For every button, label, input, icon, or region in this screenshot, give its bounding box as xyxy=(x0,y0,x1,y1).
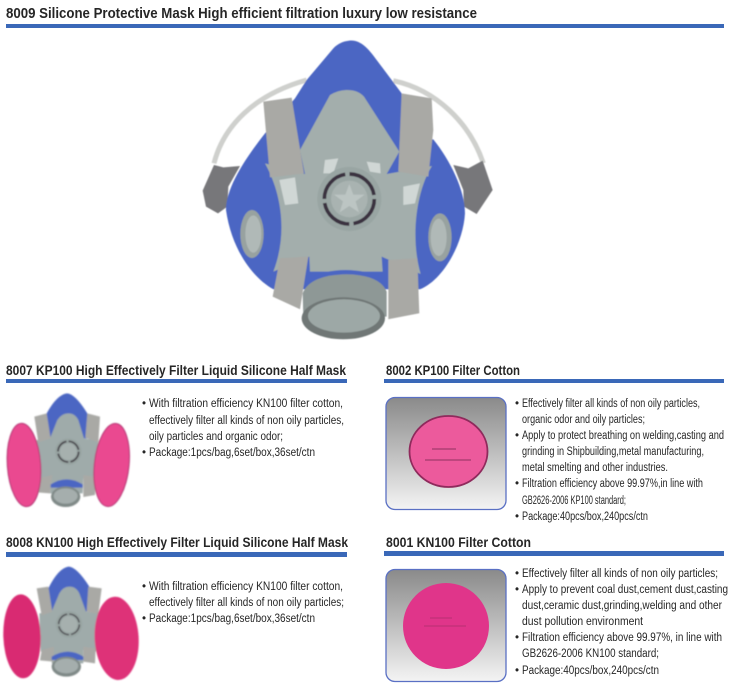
section heading: 8002 xyxy=(384,362,724,383)
text block: 8008 description: • xyxy=(142,581,146,593)
section heading: 8008: 8008 KN100 High Effectively Filter Liquid Silicone Half Mask xyxy=(6,534,348,550)
title xyxy=(6,5,724,28)
text block: 8001 description: GB2626-2006 KN100 standard; xyxy=(522,648,659,660)
centre valve xyxy=(317,167,381,231)
main product photo: 8009 mask xyxy=(203,41,493,339)
text block: 8001 description: Package:40pcs/box,240pcs/ctn xyxy=(522,665,659,677)
section heading: 8007: 8007 KP100 High Effectively Filter Liquid Silicone Half Mask xyxy=(6,362,346,378)
section heading: 8001 xyxy=(384,534,724,556)
headband xyxy=(214,80,483,163)
product photo: 8001 filter cotton xyxy=(386,570,506,682)
text block: 8001 description: dust pollution environment xyxy=(522,616,644,628)
left filter port xyxy=(240,210,264,258)
right filter port xyxy=(428,213,452,261)
right buckle xyxy=(453,161,493,214)
text block: 8002 description xyxy=(515,398,724,523)
text block: 8002 description: • xyxy=(515,398,519,410)
product photo: 8007 mask with filters xyxy=(4,393,133,508)
text block: 8007 description: oily particles and organic odor; xyxy=(149,431,283,443)
text block: 8002 description: • xyxy=(515,430,519,442)
text block: 8002 description: • xyxy=(515,511,519,523)
blue silicone body xyxy=(226,41,465,289)
left buckle xyxy=(203,165,240,213)
text block: 8007 description: effectively filter all kinds of non oily particles, xyxy=(149,415,344,427)
text block: 8001 description xyxy=(515,568,728,677)
text block: 8008 description xyxy=(142,581,344,625)
text block: 8008 description: Package:1pcs/bag,6set/box,36set/ctn xyxy=(149,613,315,625)
exhale cover xyxy=(303,274,387,317)
text block: 8007 description: With filtration efficiency KN100 filter cotton, xyxy=(149,398,343,410)
product photo: 8002 filter cotton xyxy=(386,398,506,510)
text block: 8002 description: Package:40pcs/box,240pcs/ctn xyxy=(522,511,648,523)
section heading: 8001: 8001 KN100 Filter Cotton xyxy=(386,534,531,550)
text block: 8001 description: • xyxy=(515,568,519,580)
text block: 8002 description: organic odor and oily particles; xyxy=(522,414,645,426)
text block: 8002 description: • xyxy=(515,478,519,490)
text block: 8008 description: With filtration efficiency KN100 filter cotton, xyxy=(149,581,343,593)
text block: 8002 description: metal smelting and other industries. xyxy=(522,462,668,474)
product photo: 8008 mask with filters xyxy=(2,567,141,681)
text block: 8007 description: Package:1pcs/bag,6set/box,36set/ctn xyxy=(149,447,315,459)
text block: 8007 description: • xyxy=(142,398,146,410)
blue band xyxy=(308,270,387,287)
title: 8009 Silicone Protective Mask High efficient filtration luxury low resistance xyxy=(6,5,477,22)
section heading: 8002: 8002 KP100 Filter Cotton xyxy=(386,362,520,378)
text block: 8007 description xyxy=(142,398,344,459)
upper straps xyxy=(263,93,433,177)
frame highlights xyxy=(279,158,420,205)
lower straps xyxy=(273,257,419,319)
section heading: 8007 xyxy=(6,362,347,383)
text block: 8007 description: • xyxy=(142,447,146,459)
grey frame xyxy=(265,90,432,274)
text block: 8008 description: • xyxy=(142,613,146,625)
section heading: 8008 xyxy=(6,534,348,557)
text block: 8001 description: • xyxy=(515,665,519,677)
text block: 8002 description: GB2626-2006 KP100 standard; xyxy=(522,495,626,507)
text block: 8008 description: effectively filter all kinds of non oily particles; xyxy=(149,597,344,609)
text block: 8001 description: • xyxy=(515,632,519,644)
text block: 8001 description: • xyxy=(515,584,519,596)
